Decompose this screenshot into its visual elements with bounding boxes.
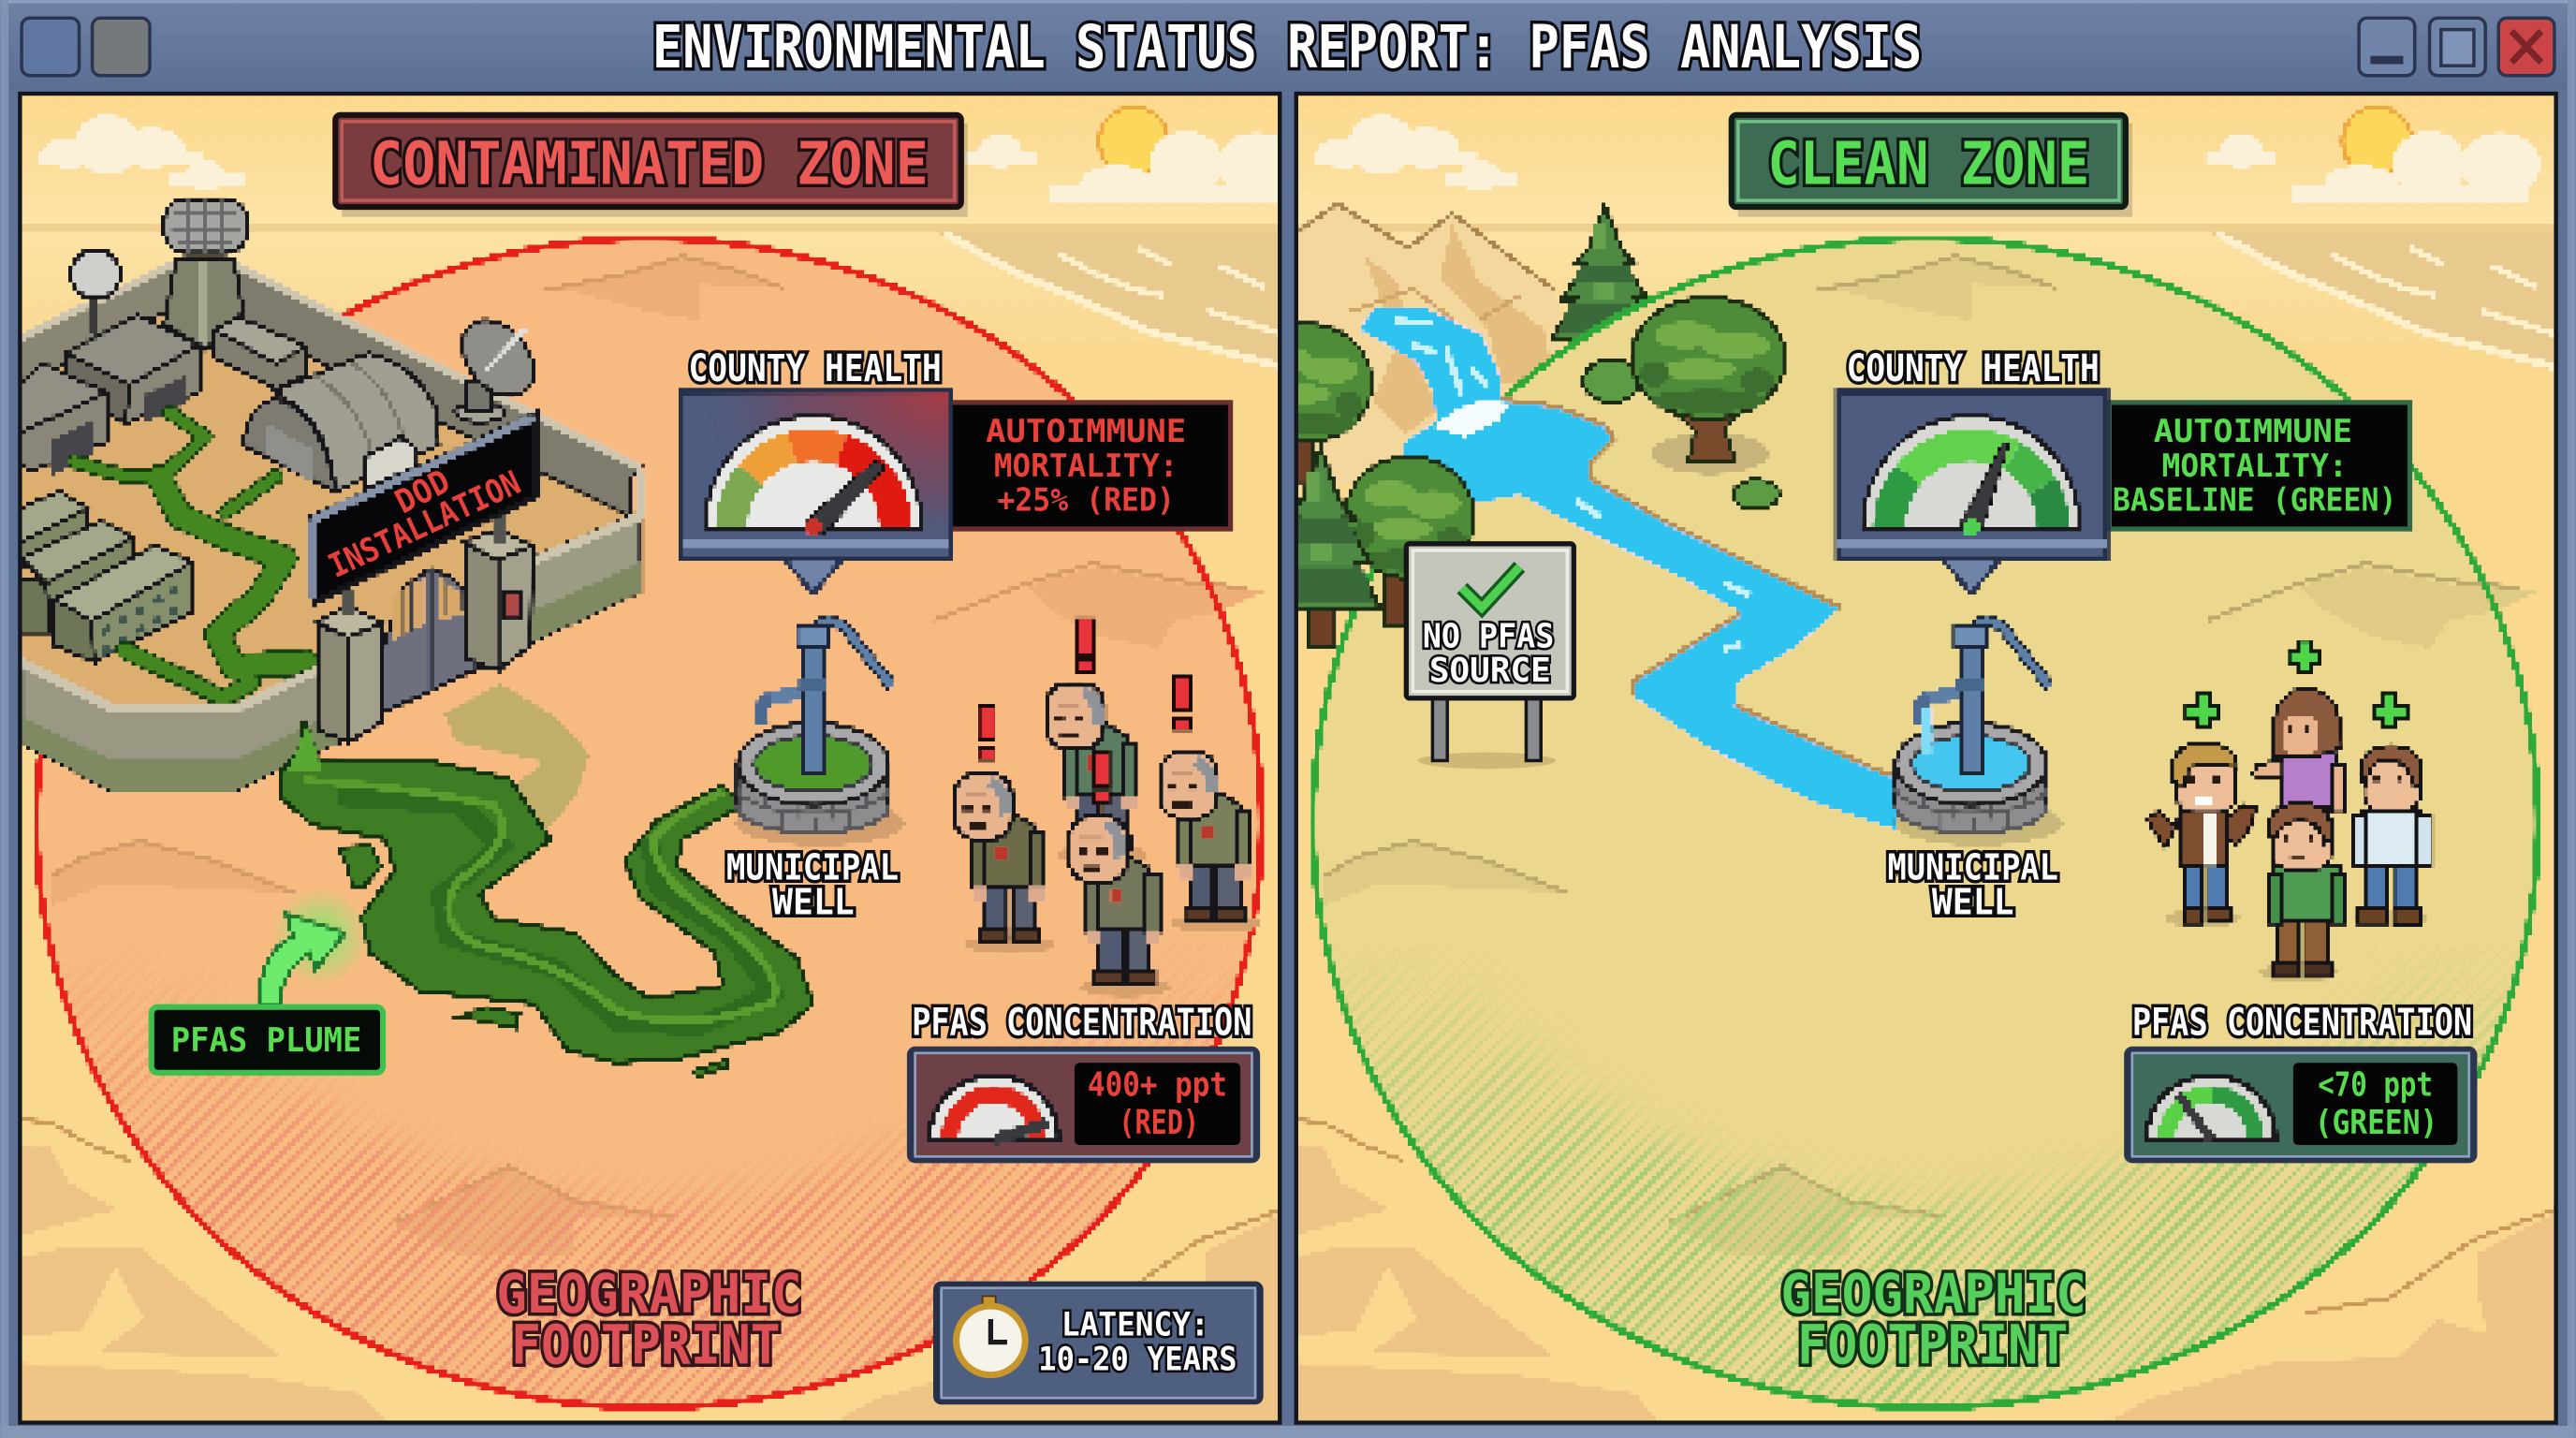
mortality readout: +25% (RED)	[997, 482, 1175, 520]
gate and pillars	[317, 529, 533, 742]
sign: no PFAS source	[1406, 544, 1573, 769]
mountains	[1281, 204, 1564, 492]
mortality readout	[950, 403, 1231, 529]
PFAS plume	[280, 683, 813, 1076]
label: geographic footprint, contaminated: FOOTPRINT	[511, 1313, 781, 1376]
sign: DoD installation: INSTALLATION	[323, 463, 526, 586]
PFAS concentration, contaminated	[910, 1000, 1257, 1160]
mortality readout: MORTALITY:	[994, 448, 1178, 485]
municipal well, clean	[1893, 621, 2063, 846]
latency panel: 10-20 YEARS	[1038, 1340, 1237, 1378]
PFAS concentration, contaminated: PFAS CONCENTRATION	[912, 1000, 1251, 1044]
sign: DoD installation: DOD	[389, 462, 456, 521]
label: municipal well	[1887, 847, 2058, 924]
PFAS concentration, clean: PFAS CONCENTRATION	[2132, 1000, 2472, 1044]
PFAS concentration, contaminated: (RED)	[1119, 1104, 1199, 1142]
label: geographic footprint, clean	[1780, 1262, 2086, 1376]
municipal well, contaminated	[735, 621, 905, 846]
mortality readout	[2109, 403, 2409, 529]
pixel art scene: clean	[1244, 82, 2576, 1437]
healthy residents	[2147, 640, 2431, 982]
PFAS concentration, clean: <70 ppt	[2318, 1065, 2433, 1104]
pixel art scene: contaminated	[7, 82, 1305, 1437]
PFAS concentration, contaminated: 400+ ppt	[1088, 1065, 1227, 1104]
footprint circle: red	[37, 238, 1265, 1408]
big satellite dish	[451, 316, 535, 425]
arrow: PFAS plume callout	[259, 888, 370, 1005]
barracks	[22, 492, 193, 662]
PFAS concentration, clean: (GREEN)	[2315, 1104, 2437, 1142]
back walls	[22, 261, 641, 516]
perimeter walls, front	[22, 512, 641, 790]
banner: clean zone	[1732, 115, 2132, 217]
label: geographic footprint, clean: FOOTPRINT	[1797, 1313, 2068, 1376]
person: man in brown jacket	[2147, 742, 2256, 928]
icon: stopwatch	[957, 1296, 1025, 1375]
hangar	[243, 353, 439, 492]
person: woman	[2252, 688, 2346, 814]
label: geographic footprint, contaminated: GEOGRAPHIC	[496, 1262, 802, 1326]
latency panel: LATENCY:	[1061, 1306, 1209, 1344]
panel: clean zone	[1244, 82, 2576, 1437]
banner: clean zone: CLEAN ZONE	[1767, 129, 2089, 198]
trees	[1244, 298, 1786, 647]
sign: no PFAS source: SOURCE	[1429, 652, 1551, 690]
mortality readout: BASELINE (GREEN)	[2113, 482, 2396, 520]
icon: check mark	[1462, 566, 1519, 608]
banner: contaminated zone	[335, 115, 968, 217]
radar tower	[165, 198, 247, 350]
sign: DoD installation	[309, 414, 535, 603]
latency panel	[936, 1284, 1260, 1401]
sick residents	[955, 620, 1262, 997]
label: municipal well	[726, 847, 899, 924]
contamination channels inside base	[74, 412, 306, 698]
person: man in white shirt	[2352, 746, 2431, 928]
county health gauge, clean	[1838, 392, 2409, 593]
label: county health: COUNTY HEALTH	[689, 346, 942, 390]
PFAS concentration, clean	[2128, 1000, 2474, 1160]
county health gauge, contaminated	[682, 392, 1231, 593]
panel: contaminated zone	[7, 82, 1305, 1437]
label: geographic footprint, clean: GEOGRAPHIC	[1780, 1262, 2086, 1326]
callout: PFAS plume	[152, 1007, 383, 1073]
title bar buttons, left	[22, 18, 150, 76]
left satellite dish	[71, 250, 120, 335]
sheds	[22, 315, 307, 477]
title: ENVIRONMENTAL STATUS REPORT: PFAS ANALYSIS	[652, 12, 1922, 81]
label: municipal well: MUNICIPAL	[726, 847, 899, 889]
mortality readout: AUTOIMMUNE	[986, 413, 1186, 450]
window controls, right	[2359, 18, 2554, 76]
DoD installation base	[22, 198, 641, 790]
label: municipal well: MUNICIPAL	[1887, 847, 2058, 889]
footprint circle: green	[1312, 238, 2538, 1408]
mortality readout: AUTOIMMUNE	[2154, 413, 2352, 450]
label: county health: COUNTY HEALTH	[1847, 346, 2100, 390]
sign: no PFAS source: NO PFAS	[1423, 617, 1554, 655]
label: geographic footprint, contaminated	[496, 1262, 802, 1376]
label: municipal well: WELL	[772, 882, 855, 924]
mortality readout: MORTALITY:	[2162, 448, 2348, 485]
person: boy in green sweater	[2259, 803, 2344, 982]
label: municipal well: WELL	[1932, 882, 2014, 924]
river	[1358, 309, 1895, 829]
banner: contaminated zone: CONTAMINATED ZONE	[370, 129, 929, 198]
pine tree, back	[1553, 205, 1658, 366]
sign posts	[348, 512, 500, 616]
callout: PFAS plume: PFAS PLUME	[171, 1021, 361, 1060]
